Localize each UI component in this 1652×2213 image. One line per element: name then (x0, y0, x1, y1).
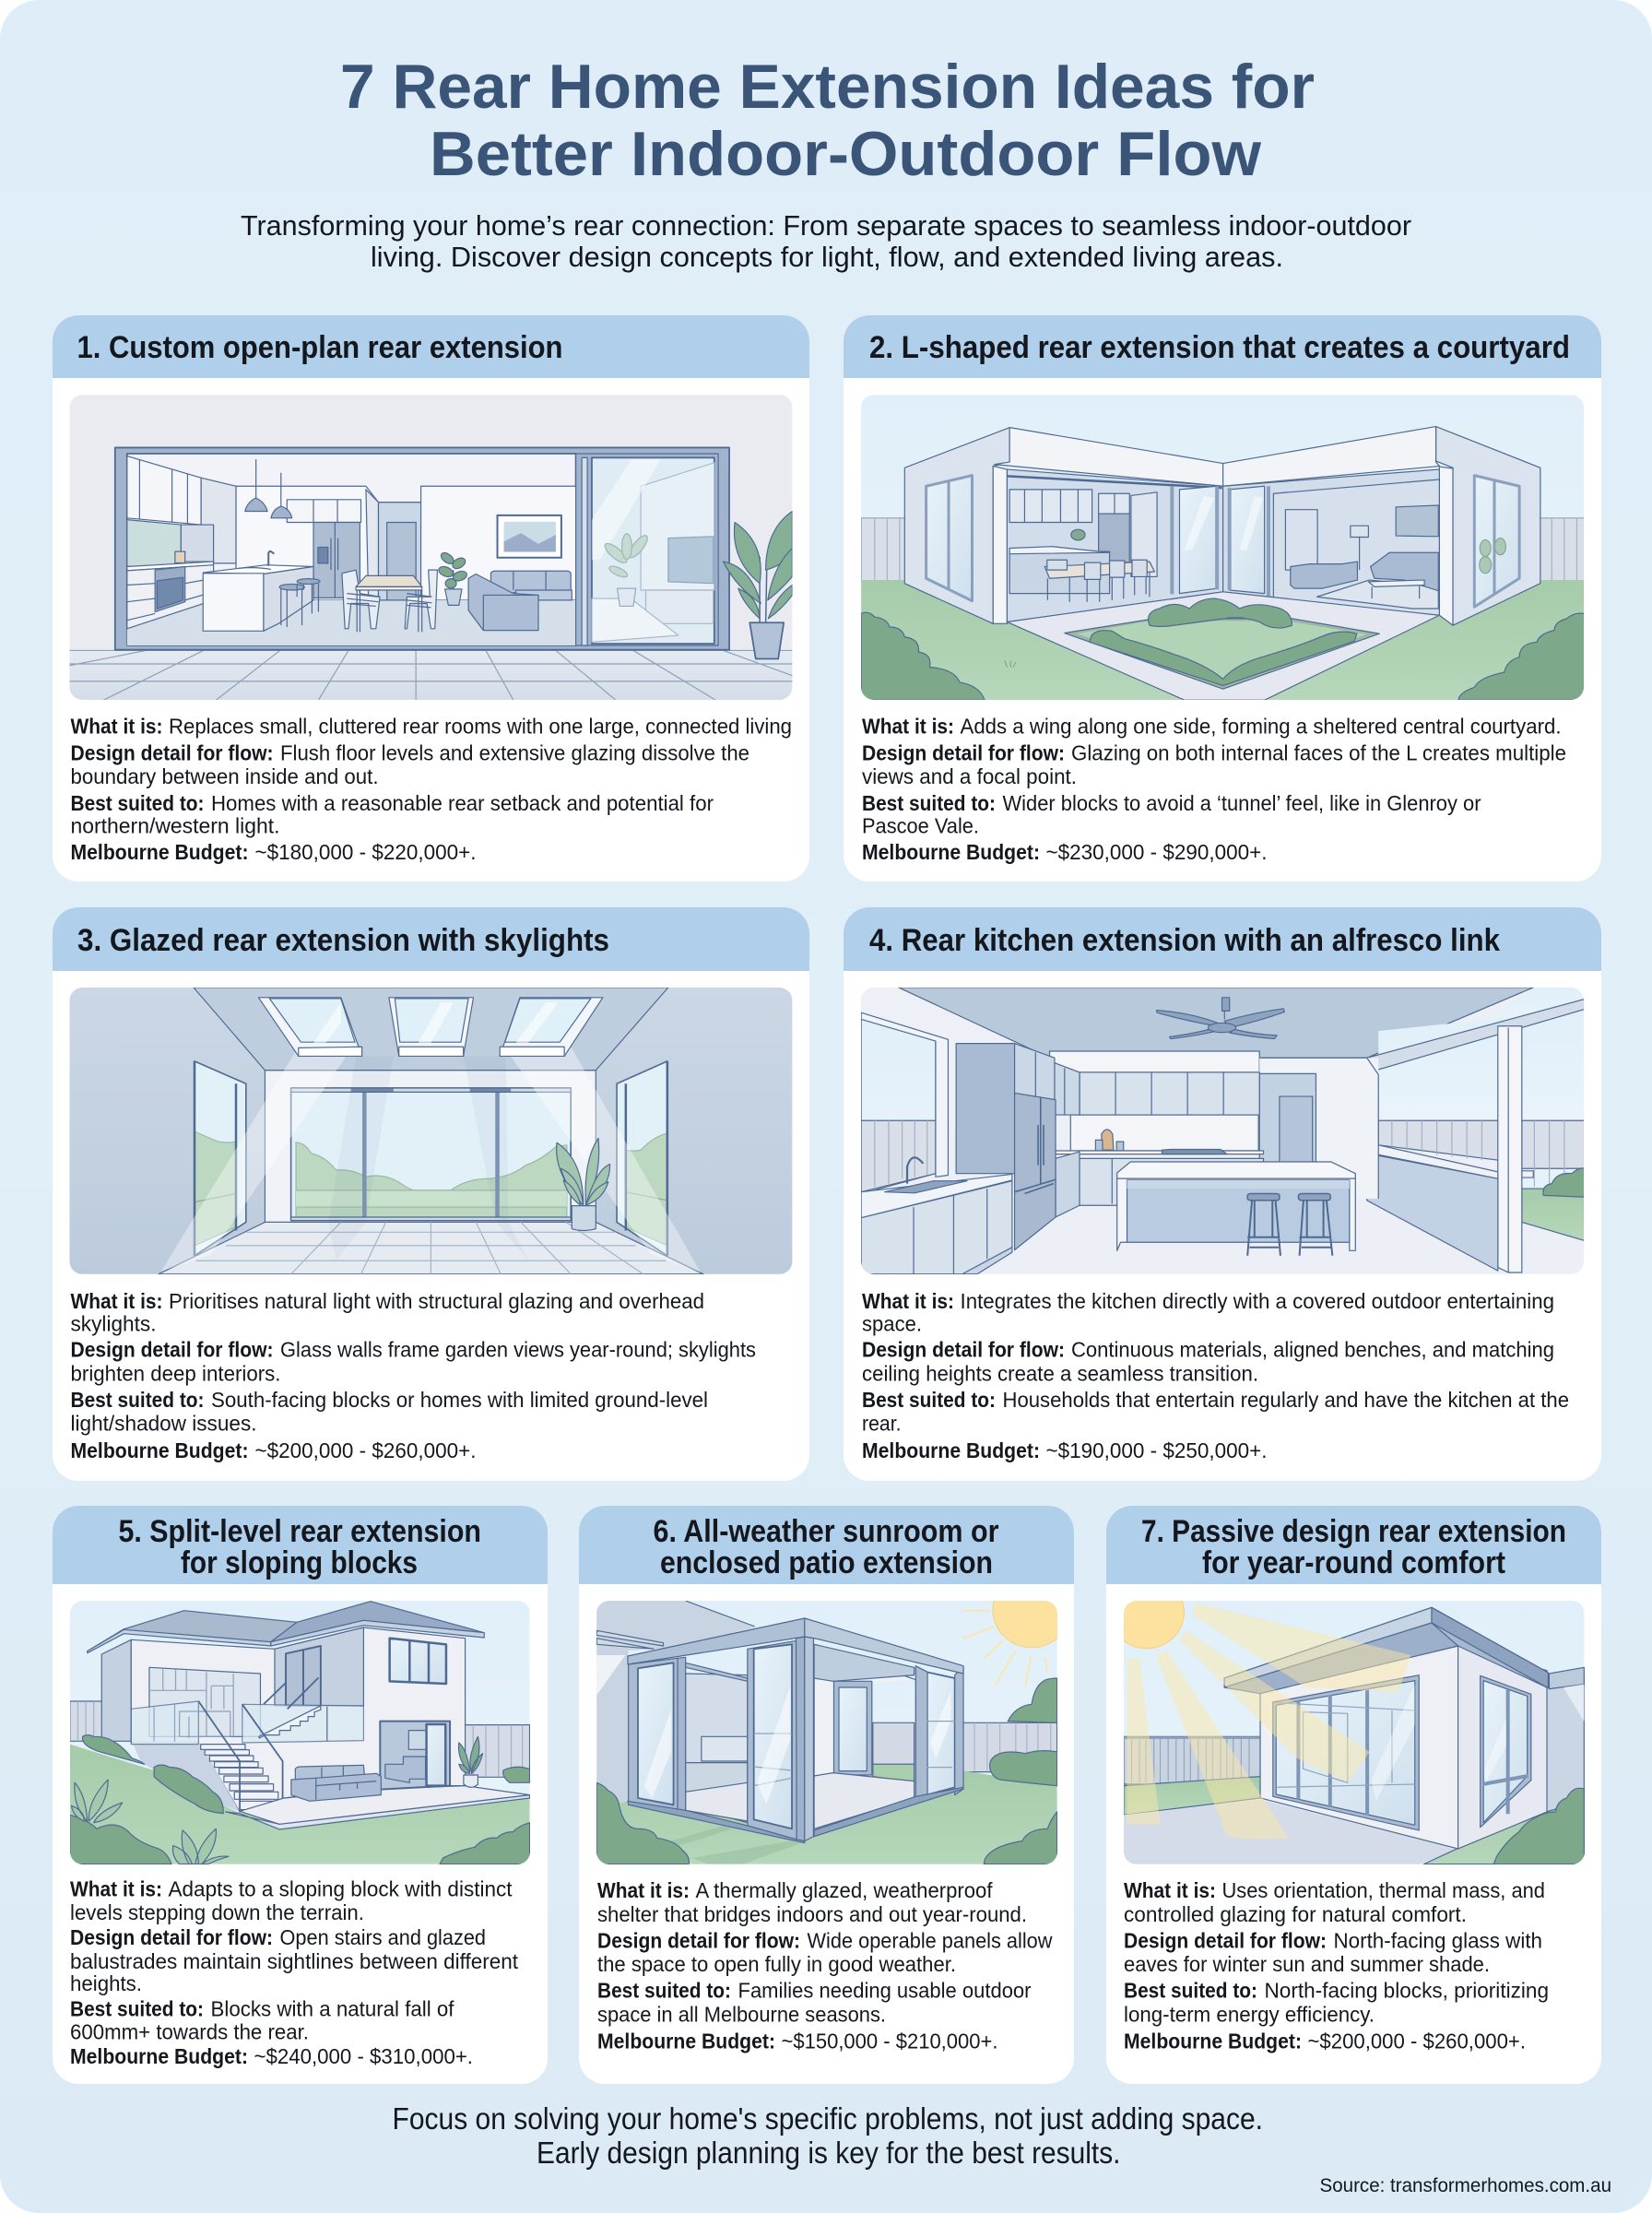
text: description 2: Best suited to: (862, 791, 996, 815)
text: description 1: Flush floor levels and extensive glazing dissolve the (280, 741, 749, 765)
text: description 4 (862, 1289, 1569, 1462)
text: description 5 (70, 1877, 518, 2068)
panel: 5 split-level rear extension (53, 1506, 548, 2084)
heading 1: 1. Custom open-plan rear extension (77, 330, 562, 365)
title: Better Indoor-Outdoor Flow (430, 119, 1262, 189)
text: description 5: Melbourne Budget: (70, 2044, 248, 2068)
heading 5 (53, 1506, 548, 1584)
text: description 6: Families needing usable outdoor (738, 1979, 1032, 2003)
text: description 1 (70, 714, 792, 864)
title (340, 52, 1315, 189)
text: description 5: Blocks with a natural fall of (210, 1997, 454, 2021)
text: description 2: What it is: (862, 714, 954, 738)
text: description 4: Integrates the kitchen directly with a covered outdoor entertaining (961, 1289, 1554, 1313)
text: description 3: Prioritises natural light with structural glazing and overhead (169, 1289, 704, 1313)
heading 4 (844, 907, 1601, 971)
panel: 2 L-shaped rear extension (844, 315, 1601, 882)
heading 6: 6. All-weather sunroom or (653, 1514, 999, 1549)
text: description 3: skylights. (70, 1311, 157, 1335)
text: description 1: northern/western light. (70, 813, 280, 837)
footer message (393, 2101, 1263, 2170)
text: description 4: Design detail for flow: (862, 1337, 1065, 1361)
heading 3 (53, 907, 809, 971)
heading 7: for year-round comfort (1202, 1545, 1505, 1580)
illustration: split-level house on slope (70, 1601, 530, 1864)
text: description 2: Glazing on both internal faces of the L creates multiple (1071, 741, 1566, 765)
text: description 7: Uses orientation, thermal mass, and (1222, 1878, 1545, 1902)
text: description 3: ~$200,000 - $260,000+. (254, 1438, 476, 1462)
text: description 3: What it is: (70, 1289, 162, 1313)
text: description 1: Replaces small, cluttered rear rooms with one large, connected living (169, 714, 792, 738)
panel: 3 glazed rear extension with skylights (53, 907, 809, 1481)
text: description 2: Wider blocks to avoid a ‘tunnel’ feel, like in Glenroy or (1003, 791, 1481, 815)
text: description 6: the space to open fully in good weather. (597, 1952, 956, 1976)
illustration: open-plan interior through sliding doors (69, 395, 792, 700)
text: description 4: ~$190,000 - $250,000+. (1045, 1438, 1267, 1462)
text: description 6: ~$150,000 - $210,000+. (782, 2029, 997, 2053)
text: description 6: Melbourne Budget: (597, 2029, 775, 2053)
text: description 3 (70, 1289, 756, 1462)
text: description 4: Continuous materials, aligned benches, and matching (1071, 1337, 1554, 1361)
title: 7 Rear Home Extension Ideas for (340, 52, 1315, 122)
text: description 2: Melbourne Budget: (862, 840, 1040, 864)
heading 5: 5. Split-level rear extension (118, 1514, 481, 1549)
text: description 2: Design detail for flow: (862, 741, 1065, 765)
text: description 5: 600mm+ towards the rear. (70, 2019, 309, 2043)
text: description 5: balustrades maintain sightlines between different (70, 1949, 518, 1973)
text: description 7: Melbourne Budget: (1124, 2029, 1302, 2053)
subtitle (241, 209, 1411, 273)
text: description 6: Best suited to: (597, 1979, 731, 2003)
subtitle: Transforming your home’s rear connection: From separate spaces to seamless indoor-outdoor (241, 209, 1411, 242)
text: description 7: ~$200,000 - $260,000+. (1307, 2029, 1526, 2053)
text: description 6: What it is: (597, 1878, 690, 1902)
text: description 7 (1124, 1878, 1549, 2053)
illustration: passive design house with sun rays (1124, 1601, 1585, 1864)
text: description 1: What it is: (70, 714, 162, 738)
text: description 7: Design detail for flow: (1124, 1929, 1327, 1953)
text: description 1: Homes with a reasonable rear setback and potential for (211, 791, 714, 815)
text: description 5: ~$240,000 - $310,000+. (254, 2044, 473, 2068)
panel: 6 all-weather sunroom (579, 1506, 1074, 2084)
text: description 3: Best suited to: (70, 1388, 205, 1412)
text: description 1: Design detail for flow: (70, 741, 273, 765)
text: description 5: What it is: (70, 1877, 162, 1901)
text: description 2: Adds a wing along one side, forming a sheltered central courtyard. (961, 714, 1562, 738)
text: description 7: North-facing blocks, prioritizing (1265, 1979, 1549, 2003)
text: description 2: Pascoe Vale. (862, 813, 979, 837)
text: description 6: shelter that bridges indoors and out year-round. (597, 1902, 1027, 1926)
panel: 4 rear kitchen extension with alfresco link (844, 907, 1601, 1481)
heading 6 (579, 1506, 1074, 1584)
heading 1 (53, 315, 809, 378)
heading 5: for sloping blocks (181, 1545, 418, 1580)
heading 6: enclosed patio extension (660, 1545, 993, 1580)
heading 2: 2. L-shaped rear extension that creates a courtyard (869, 330, 1570, 365)
text: description 2 (862, 714, 1566, 864)
heading 7 (1106, 1506, 1601, 1584)
text: description 2: ~$230,000 - $290,000+. (1045, 840, 1267, 864)
illustration: kitchen with alfresco link (861, 988, 1585, 1274)
text: description 6: Design detail for flow: (597, 1929, 800, 1953)
heading 7: 7. Passive design rear extension (1141, 1514, 1566, 1549)
text: description 5: Design detail for flow: (70, 1925, 273, 1949)
text: description 3: South-facing blocks or homes with limited ground-level (211, 1388, 708, 1412)
panel: 1 custom open-plan rear extension (53, 315, 809, 882)
text: description 3: Melbourne Budget: (70, 1438, 249, 1462)
text: description 7: controlled glazing for natural comfort. (1124, 1902, 1467, 1926)
text: description 5: Best suited to: (70, 1997, 204, 2021)
text: description 1: ~$180,000 - $220,000+. (254, 840, 476, 864)
text: description 3: Design detail for flow: (70, 1337, 273, 1361)
text: description 7: long-term energy efficiency. (1124, 2003, 1375, 2027)
heading 3: 3. Glazed rear extension with skylights (77, 923, 609, 958)
heading 4: 4. Rear kitchen extension with an alfresco link (869, 923, 1500, 958)
heading 2 (844, 315, 1601, 378)
text: description 2: views and a focal point. (862, 764, 1077, 788)
text: description 4: Households that entertain regularly and have the kitchen at the (1003, 1388, 1569, 1412)
footer message: Early design planning is key for the best results. (537, 2136, 1121, 2170)
footer message: Focus on solving your home's specific problems, not just adding space. (393, 2101, 1263, 2136)
text: description 3: brighten deep interiors. (70, 1361, 280, 1385)
text: description 7: What it is: (1124, 1878, 1216, 1902)
text: description 5: levels stepping down the terrain. (70, 1900, 364, 1924)
text: description 4: Best suited to: (862, 1388, 996, 1412)
panel: 7 passive design rear extension (1106, 1506, 1601, 2084)
text: description 4: rear. (862, 1411, 902, 1435)
text: description 5: Open stairs and glazed (280, 1925, 486, 1949)
text: description 5: heights. (70, 1971, 142, 1995)
illustration: L-shaped extension with courtyard (861, 395, 1585, 700)
text: description 5: Adapts to a sloping block with distinct (168, 1877, 513, 1901)
source credit: Source: transformerhomes.com.au (1320, 2175, 1611, 2196)
text: description 6: space in all Melbourne seasons. (597, 2003, 886, 2027)
text: description 7: North-facing glass with (1333, 1929, 1542, 1953)
text: description 6: Wide operable panels allow (808, 1929, 1053, 1953)
text: description 4: ceiling heights create a seamless transition. (862, 1361, 1258, 1385)
text: description 6 (597, 1878, 1053, 2053)
text: description 4: What it is: (862, 1289, 954, 1313)
text: description 7: Best suited to: (1124, 1979, 1257, 2003)
illustration: sunroom with sun (596, 1601, 1057, 1864)
text: description 3: light/shadow issues. (70, 1411, 256, 1435)
subtitle: living. Discover design concepts for light, flow, and extended living areas. (371, 241, 1283, 273)
text: description 3: Glass walls frame garden views year-round; skylights (280, 1337, 756, 1361)
text: description 7: eaves for winter sun and summer shade. (1124, 1952, 1490, 1976)
text: description 1: Best suited to: (70, 791, 205, 815)
illustration: glazed room with skylights (69, 988, 792, 1274)
text: description 6: A thermally glazed, weatherproof (695, 1878, 993, 1902)
text: description 1: boundary between inside and out. (70, 764, 378, 788)
text: description 4: Melbourne Budget: (862, 1438, 1040, 1462)
text: description 4: space. (862, 1311, 922, 1335)
text: description 1: Melbourne Budget: (70, 840, 249, 864)
